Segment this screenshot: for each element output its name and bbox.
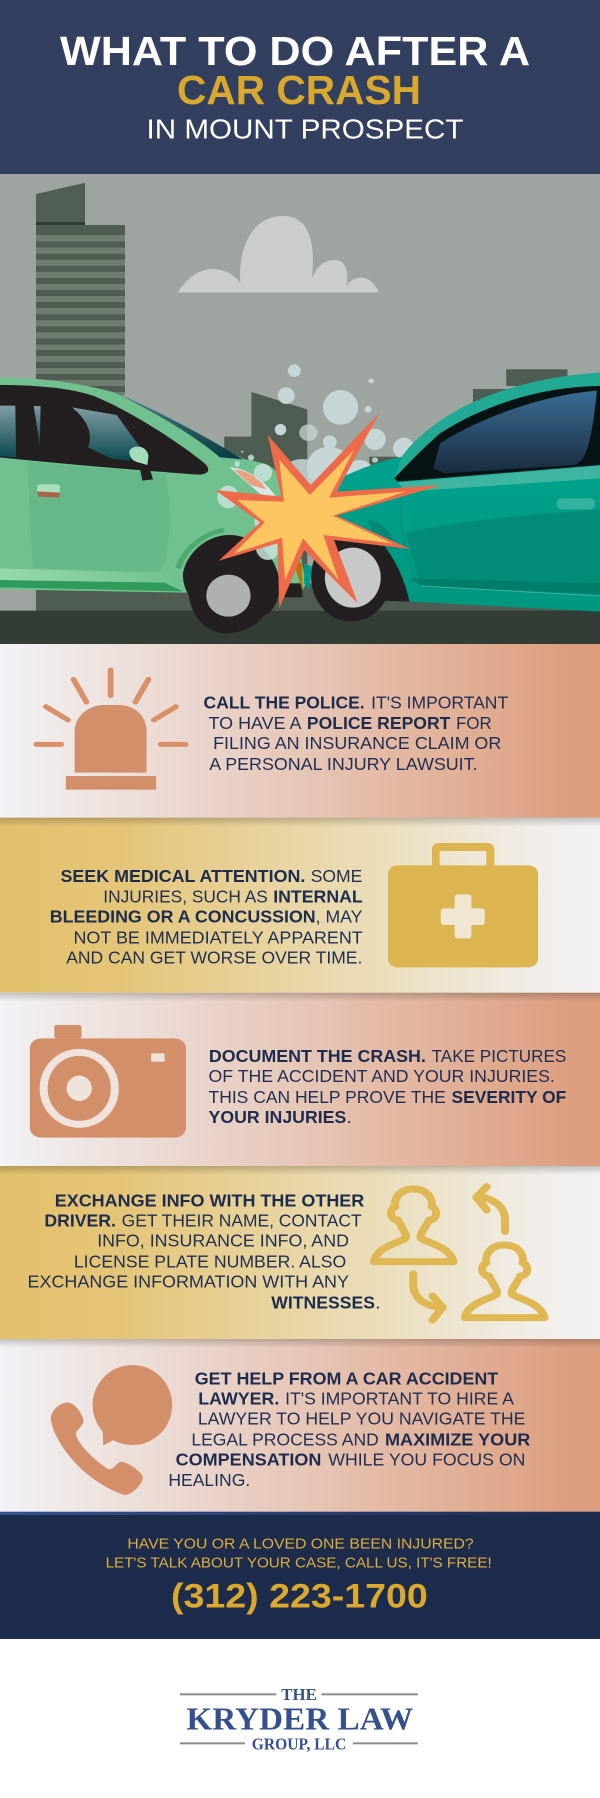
text: call the police: FILING AN INSURANCE CLAIM OR bbox=[213, 733, 501, 754]
text: document the crash: YOUR INJURIES bbox=[209, 1107, 346, 1128]
text: get help from a lawyer: LEGAL PROCESS AND bbox=[191, 1430, 379, 1450]
teal car bbox=[329, 373, 600, 612]
door panel bbox=[28, 462, 170, 572]
text: exchange info: LICENSE PLATE NUMBER. ALSO bbox=[74, 1252, 346, 1272]
text: seek medical attention: BLEEDING OR A CONCUSSION bbox=[50, 907, 316, 927]
text: seek medical attention: SOME bbox=[311, 866, 362, 887]
text: call the police: IT'S IMPORTANT bbox=[371, 693, 508, 713]
text: call the police: CALL THE POLICE. bbox=[204, 693, 365, 713]
text: get help from a lawyer: WHILE YOU FOCUS ON bbox=[328, 1450, 525, 1470]
illustration: car crash scene bbox=[0, 174, 600, 644]
bubbles over the cars bbox=[217, 451, 378, 560]
text: exchange info: EXCHANGE INFO WITH THE OTHER bbox=[55, 1191, 364, 1211]
panel: exchange info bbox=[0, 1166, 600, 1339]
text: call the police: FOR bbox=[456, 713, 492, 734]
text: document the crash: . bbox=[346, 1107, 352, 1128]
panel: seek medical attention bbox=[0, 818, 600, 993]
logo: the kryder law group bbox=[180, 1685, 418, 1753]
text: seek medical attention: SEEK MEDICAL ATTENTION. bbox=[60, 866, 305, 887]
icon: two people exchanging info bbox=[374, 1187, 545, 1320]
text: get help from a lawyer: COMPENSATION bbox=[176, 1450, 321, 1470]
title: what to do after a: WHAT TO DO AFTER A bbox=[60, 28, 530, 74]
side mirror bbox=[139, 462, 153, 481]
text: call the police: POLICE REPORT bbox=[307, 713, 451, 734]
text: document the crash: THIS CAN HELP PROVE THE bbox=[209, 1087, 446, 1108]
text: exchange info: DRIVER. bbox=[44, 1211, 116, 1231]
teal car door handle bbox=[557, 498, 595, 509]
wheels bbox=[183, 532, 409, 633]
smoke bubbles bbox=[275, 364, 414, 498]
door handle bbox=[37, 484, 60, 494]
crash starburst bbox=[215, 413, 442, 608]
text: seek medical attention: AND CAN GET WORSE OVER TIME. bbox=[66, 948, 362, 968]
call to action text bbox=[106, 1535, 492, 1571]
call to action text: HAVE YOU OR A LOVED ONE BEEN INJURED? bbox=[127, 1535, 474, 1552]
text: document the crash: SEVERITY OF bbox=[452, 1087, 566, 1108]
panel: get help from a lawyer bbox=[0, 1339, 600, 1512]
text: call the police: TO HAVE A bbox=[209, 713, 302, 734]
green car bbox=[0, 377, 306, 593]
text: seek medical attention bbox=[50, 866, 363, 968]
text: document the crash bbox=[209, 1046, 566, 1128]
text: call the police bbox=[204, 693, 508, 775]
cloud bbox=[178, 216, 379, 292]
title: car crash: CAR CRASH bbox=[177, 67, 421, 113]
text: seek medical attention: INTERNAL bbox=[273, 887, 363, 907]
subtitle: in mount prospect: IN MOUNT PROSPECT bbox=[146, 113, 464, 144]
text: exchange info: GET THEIR NAME, CONTACT bbox=[122, 1211, 362, 1231]
icon: first aid kit bbox=[388, 843, 538, 967]
text: get help from a lawyer: LAWYER TO HELP YOU NAVIGATE THE bbox=[198, 1409, 525, 1429]
text: get help from a lawyer bbox=[168, 1369, 530, 1491]
text: document the crash: DOCUMENT THE CRASH. bbox=[209, 1046, 426, 1067]
icon: siren bbox=[36, 670, 186, 790]
text: document the crash: TAKE PICTURES bbox=[432, 1046, 566, 1067]
text: call the police: A PERSONAL INJURY LAWSUIT. bbox=[209, 754, 478, 775]
logo: the kryder law group: KRYDER LAW bbox=[186, 1701, 413, 1737]
icon: camera bbox=[30, 1025, 186, 1138]
panel: call the police bbox=[0, 644, 600, 818]
panel: document the crash bbox=[0, 993, 600, 1166]
footer call to action bbox=[0, 1512, 600, 1639]
skyscraper bbox=[36, 183, 125, 395]
headlight bbox=[230, 467, 276, 497]
text: exchange info bbox=[28, 1191, 381, 1313]
phone number: (312) 223-1700 bbox=[171, 1576, 428, 1615]
text: get help from a lawyer: LAWYER. bbox=[198, 1389, 279, 1409]
icon: phone and speech bubble bbox=[51, 1365, 172, 1495]
text: get help from a lawyer: MAXIMIZE YOUR bbox=[385, 1430, 530, 1450]
text: exchange info: INFO, INSURANCE INFO, AND bbox=[97, 1231, 349, 1251]
background buildings and ground bbox=[0, 369, 600, 644]
text: get help from a lawyer: IT'S IMPORTANT TO HIRE A bbox=[285, 1389, 514, 1409]
text: seek medical attention: INJURIES, SUCH AS bbox=[103, 887, 268, 907]
call to action text: LET'S TALK ABOUT YOUR CASE, CALL US, IT'S FREE! bbox=[106, 1554, 492, 1571]
text: exchange info: WITNESSES bbox=[271, 1293, 375, 1313]
text: get help from a lawyer: GET HELP FROM A CAR ACCIDENT bbox=[195, 1369, 498, 1389]
text: seek medical attention: NOT BE IMMEDIATELY APPARENT bbox=[73, 928, 363, 948]
text: exchange info: EXCHANGE INFORMATION WITH ANY bbox=[28, 1272, 349, 1292]
text: get help from a lawyer: HEALING. bbox=[168, 1470, 250, 1491]
logo: the kryder law group: GROUP, LLC bbox=[252, 1734, 346, 1753]
text: seek medical attention: , MAY bbox=[316, 907, 362, 927]
text: exchange info: . bbox=[375, 1293, 381, 1313]
header band bbox=[0, 0, 600, 174]
logo: the kryder law group: THE bbox=[281, 1685, 317, 1704]
